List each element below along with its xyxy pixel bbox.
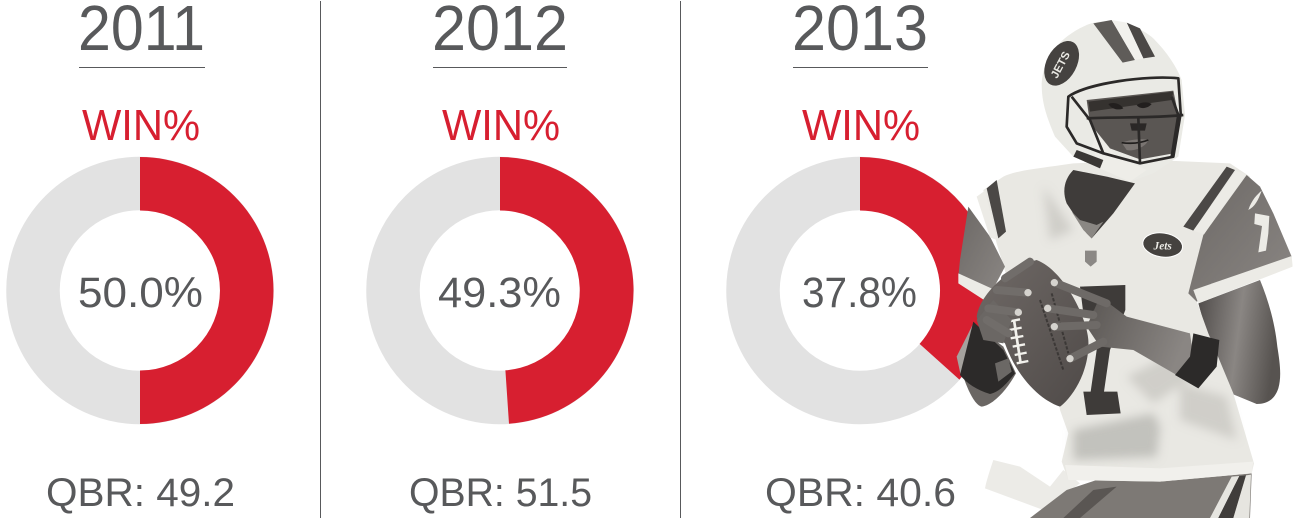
chin strap [1092,133,1147,182]
donut chart: 50.0% [33,157,274,424]
pants [1030,473,1252,518]
neck [1064,170,1135,238]
jersey number 7 [1080,285,1125,415]
chest V [1072,212,1103,238]
label: win percent: WIN% [442,101,560,150]
facemask [1067,78,1183,163]
donut chart: 37.8% [753,157,993,398]
stat: QBR 2013: QBR: 40.6 [765,471,956,515]
chest logo: Jets [1153,240,1172,252]
left sleeve [958,180,1006,301]
right sleeve [1183,167,1293,303]
right forearm and hand [1044,279,1219,388]
NFL shield [1085,251,1097,267]
donut chart: 49.3%: 49.3% [438,269,561,317]
photo: quarterback in Jets uniform [957,20,1293,518]
right upper arm [1198,280,1280,404]
chest logo [1141,230,1184,260]
stat: QBR 2011: QBR: 49.2 [46,471,235,515]
jersey torso [983,160,1254,482]
jersey folds [1043,187,1237,460]
label: win percent: WIN% [82,101,200,150]
helmet logo: JETS [1049,49,1073,80]
panel: 2012 [393,0,634,515]
helmet logo [1037,35,1086,92]
jersey hem [1065,462,1253,482]
label: win percent: WIN% [802,101,920,150]
stat: QBR 2012: QBR: 51.5 [409,471,592,515]
helmet [1037,20,1185,182]
panel: 2013 [753,0,993,515]
towel [985,460,1080,510]
donut chart: 37.8%: 37.8% [802,269,917,317]
left forearm and hand [957,262,1032,407]
donut chart: 50.0%: 50.0% [78,269,203,317]
face [1087,91,1179,159]
football [977,260,1088,407]
panel: 2011 [33,0,274,515]
donut chart: 49.3% [393,157,634,424]
wristband [1175,333,1219,388]
